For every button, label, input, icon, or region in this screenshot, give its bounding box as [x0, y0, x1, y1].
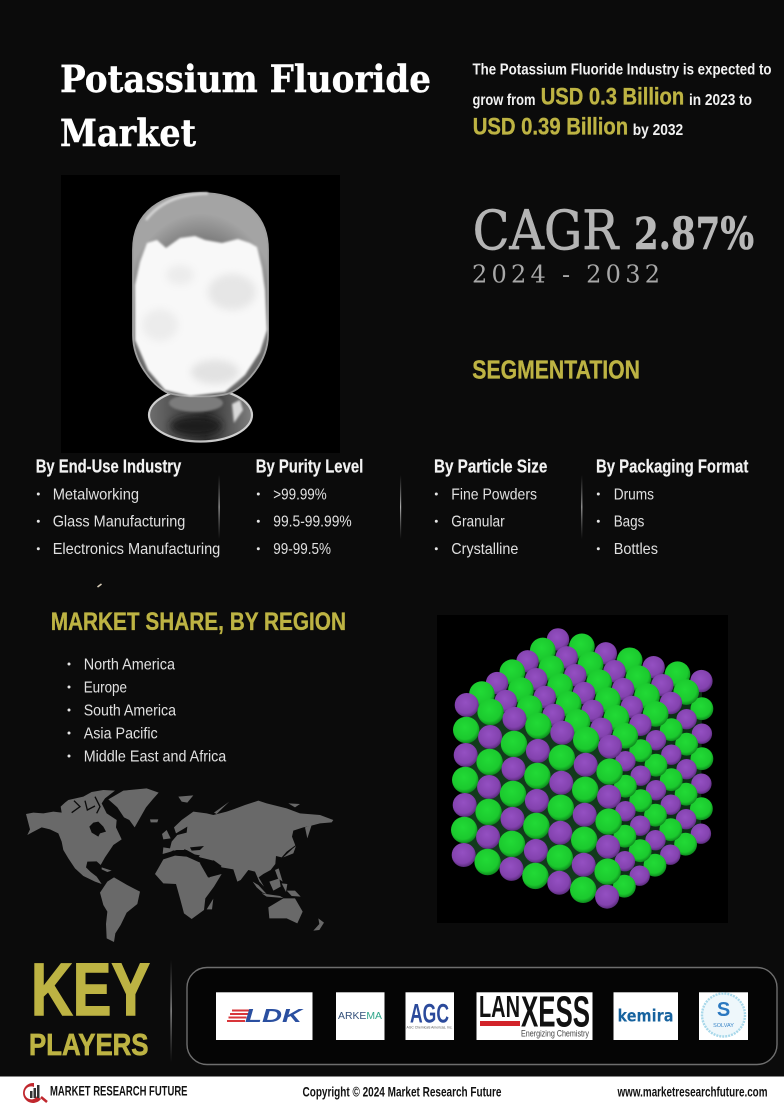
segment column: by particle size: By Particle Size — [434, 456, 547, 476]
lattice: front face — [451, 693, 623, 909]
segment column: by particle size: Granular — [451, 514, 505, 531]
market growth summary text: grow from — [472, 92, 536, 109]
region list: South America — [84, 703, 176, 720]
logo: Solvay: SOLVAY — [713, 1023, 734, 1029]
region list: Middle East and Africa — [84, 748, 226, 765]
logo: Solvay — [699, 992, 748, 1040]
key players heading: PLAYERS — [29, 1027, 148, 1062]
region list — [68, 656, 226, 765]
footer bar — [0, 1076, 784, 1108]
logo: LDK — [216, 992, 312, 1040]
jar glass body — [133, 193, 268, 396]
segment column: by end-use industry: Metalworking — [53, 486, 139, 503]
market growth summary text: by 2032 — [633, 122, 683, 139]
lattice: right face — [613, 697, 713, 898]
region list: Europe — [84, 680, 127, 697]
segment column: by end-use industry: Electronics Manufacturing — [53, 541, 220, 558]
segment column: by end-use industry: By End-Use Industry — [36, 456, 181, 476]
lattice: top face — [469, 628, 713, 749]
segment column: by packaging format: By Packaging Format — [596, 456, 748, 476]
title: Potassium Fluoride — [60, 57, 431, 101]
segment column: by purity level: 99.5-99.99% — [273, 514, 352, 531]
region list: North America — [84, 656, 175, 673]
logo: Lanxess: XESS — [521, 988, 590, 1036]
CAGR figure: CAGR — [473, 199, 619, 262]
segment column: by particle size: Fine Powders — [451, 486, 537, 503]
footer bar: Copyright © 2024 Market Research Future — [302, 1084, 502, 1100]
logo: AGC — [406, 992, 454, 1040]
lattice: face backing — [464, 639, 702, 897]
region list: Asia Pacific — [84, 725, 158, 742]
title: Market — [60, 111, 196, 155]
logo: AGC: AGC — [410, 998, 449, 1028]
segment column: by end-use industry — [36, 456, 220, 558]
segment column: by packaging format: Drums — [614, 486, 654, 503]
segment column: by packaging format — [596, 456, 748, 558]
segment column: by particle size: Crystalline — [451, 541, 518, 558]
key players heading — [29, 948, 150, 1062]
market growth summary text — [472, 61, 772, 140]
segment column: by purity level: >99.99% — [273, 486, 327, 503]
logo: Lanxess: Energizing Chemistry — [521, 1029, 589, 1040]
world map — [26, 788, 333, 942]
logo: Arkema — [336, 992, 384, 1040]
logo: Arkema: ARKEMA — [338, 1011, 382, 1022]
segment column: by purity level: By Purity Level — [256, 456, 363, 476]
logo: AGC: AGC Chemicals Americas, Inc. — [406, 1024, 452, 1030]
segment column: by packaging format: Bottles — [614, 541, 658, 558]
segment column: by purity level: 99-99.5% — [273, 541, 331, 558]
logo: Kemira: kemira — [618, 1006, 674, 1026]
segment column: by purity level — [256, 456, 363, 558]
jar foot — [149, 388, 252, 442]
CAGR figure — [472, 199, 754, 288]
CAGR figure: 2024 - 2032 — [472, 260, 660, 288]
logo: Solvay: S — [717, 999, 730, 1021]
segment column: by particle size — [434, 456, 547, 558]
logo: Lanxess: LAN — [479, 989, 520, 1024]
segment column: by end-use industry: Glass Manufacturing — [53, 514, 185, 531]
market growth summary text: USD 0.39 Billion — [473, 113, 628, 140]
key players heading: KEY — [31, 948, 150, 1031]
image: crystal lattice of potassium fluoride — [437, 615, 728, 923]
logo: Kemira — [614, 992, 678, 1040]
logo: LDK: LDK — [245, 1006, 305, 1026]
segment column: by packaging format: Bags — [614, 514, 644, 531]
market growth summary text: in 2023 to — [689, 92, 752, 109]
CAGR figure: 2.87% — [634, 209, 754, 260]
logo: Lanxess — [476, 988, 592, 1040]
image: glass jar of potassium fluoride powder — [61, 175, 340, 453]
footer logo icon — [23, 1083, 47, 1103]
powder — [135, 236, 267, 396]
footer bar: MARKET RESEARCH FUTURE — [50, 1083, 188, 1099]
key players panel — [187, 968, 777, 1064]
market growth summary text: USD 0.3 Billion — [541, 83, 684, 110]
market share heading: MARKET SHARE, BY REGION — [51, 608, 346, 636]
segmentation heading: SEGMENTATION — [472, 354, 640, 384]
title — [60, 57, 431, 155]
